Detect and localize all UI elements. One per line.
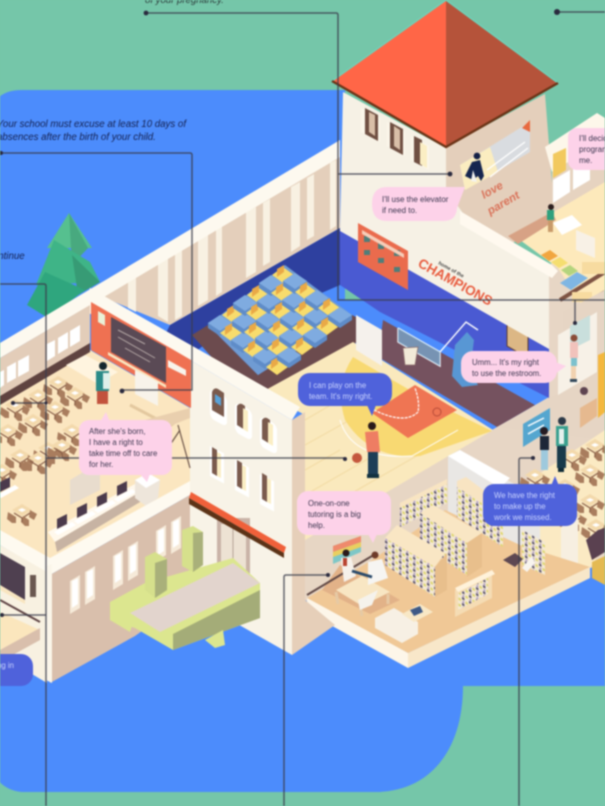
building: big beige right block bbox=[305, 232, 605, 653]
library: tables and sofa bbox=[336, 576, 433, 643]
library: floor platform bbox=[307, 510, 590, 668]
text: champions wall lettering: home of the bbox=[437, 261, 465, 280]
bubble: make up work: work we missed. bbox=[493, 513, 552, 522]
leader line dots bbox=[0, 9, 577, 617]
bubble: after she's born bbox=[79, 412, 172, 482]
bubble: play on the team: I can play on the bbox=[309, 381, 366, 390]
bubble: play on the team: team. It's my right. bbox=[309, 392, 372, 401]
bottom left classroom bbox=[0, 545, 52, 683]
text: love parent sign bbox=[480, 179, 523, 218]
left classroom: side table bbox=[130, 408, 190, 468]
bubble: make up work bbox=[483, 476, 577, 526]
text: absences note: Your school must excuse at least 10 days of bbox=[0, 119, 187, 130]
building: facade top rim bbox=[82, 288, 300, 420]
building: lower left wall bbox=[50, 495, 190, 683]
person: teacher bbox=[96, 362, 110, 404]
bubble: play on the team bbox=[298, 373, 392, 416]
text: absences note: absences after the birth of your child. bbox=[0, 132, 156, 143]
left classroom: teacher desk bbox=[66, 355, 118, 384]
library: back wall partition bbox=[307, 450, 540, 598]
building: floor rim below classroom bbox=[0, 481, 190, 575]
bubble: restroom bbox=[461, 351, 566, 383]
bubble: after she's born: for her. bbox=[89, 460, 113, 469]
left classroom: floor bbox=[0, 350, 190, 570]
text: love parent sign: parent bbox=[485, 189, 523, 218]
entrance: red awning bbox=[189, 492, 286, 558]
court: red key bbox=[340, 385, 458, 456]
icon: rainbow flag bbox=[333, 536, 361, 564]
bubble: elevator bbox=[372, 187, 465, 221]
gym floor bbox=[262, 342, 493, 540]
left classroom: student desks bbox=[0, 376, 90, 486]
left classroom: computer row bbox=[0, 462, 140, 552]
library: bookshelves bbox=[385, 477, 545, 617]
library: wall shadow beam bbox=[307, 553, 377, 595]
left classroom: printer bbox=[135, 473, 160, 506]
building: cream gym side wall bbox=[340, 92, 549, 349]
text: absences note bbox=[0, 119, 187, 143]
building: back rim along roofline bbox=[0, 140, 340, 358]
left classroom: whiteboard easel bbox=[130, 370, 188, 426]
text: champions wall lettering: CHAMPIONS bbox=[416, 256, 495, 309]
right lower room bbox=[515, 430, 605, 568]
entrance: door bbox=[217, 518, 250, 574]
bleachers bbox=[208, 265, 352, 375]
building: wall end face bbox=[549, 258, 563, 398]
bubble: bottom left partial bbox=[0, 654, 33, 686]
bubble: restroom: Umm... It's my right bbox=[472, 358, 540, 367]
building: main cream facade bbox=[190, 360, 292, 655]
text: love parent sign: love bbox=[480, 179, 506, 202]
bubble: make up work: to make up the bbox=[494, 502, 546, 511]
champions banner: red schedule board bbox=[358, 223, 408, 290]
bubble: elevator: if need to. bbox=[382, 206, 417, 215]
left classroom: red wall with blackboard bbox=[91, 302, 191, 408]
bubble: tutoring: help. bbox=[308, 521, 325, 530]
bubble: right top partial: me. bbox=[579, 156, 592, 165]
icon: low-poly tree bbox=[27, 213, 100, 318]
right middle room bbox=[497, 290, 605, 447]
building: right beige edge bbox=[292, 412, 335, 655]
person: far right at lower edge bbox=[586, 528, 605, 585]
person: two students bbox=[540, 417, 568, 472]
left classroom: back wall with windows bbox=[0, 305, 90, 405]
building: white wall rim bbox=[460, 211, 558, 278]
hoop: basketball hoop and pole bbox=[356, 315, 528, 387]
bubble: restroom: to use the restroom. bbox=[472, 369, 541, 378]
building: facade windows bbox=[210, 388, 277, 511]
bleacher base: brown stairs bbox=[192, 315, 368, 398]
tower: windows bbox=[361, 108, 429, 170]
roof bbox=[332, 0, 558, 147]
person: in upper room bbox=[547, 204, 554, 232]
tower: right face bbox=[446, 94, 552, 243]
entrance: lime steps and pillars bbox=[110, 526, 260, 650]
building: dark blue wall band bbox=[165, 228, 340, 352]
court: yellow zone bbox=[341, 357, 492, 456]
bubble: make up work: We have the right bbox=[494, 491, 556, 500]
person: gym player with ball bbox=[352, 422, 380, 478]
bubble: after she's born: take time off to care bbox=[89, 449, 157, 458]
gym stage: dark platform bbox=[378, 320, 535, 427]
building: gym back wall with pilasters bbox=[100, 155, 340, 325]
bubble: tutoring: One-on-one bbox=[308, 499, 350, 508]
bubble: tutoring: tutoring is a big bbox=[308, 510, 361, 519]
right upper room bbox=[508, 113, 605, 316]
bubble: after she's born: I have a right to bbox=[89, 438, 143, 447]
bubble: tutoring bbox=[297, 491, 391, 543]
building: lower left windows bbox=[70, 516, 181, 614]
person: tutoring students bbox=[341, 550, 388, 610]
person: girl at window bbox=[570, 334, 578, 382]
bubble: after she's born: After she's born, bbox=[89, 427, 146, 436]
tower: stair window bbox=[460, 120, 530, 190]
person: on tower stairs bbox=[465, 153, 484, 182]
bubble: right top partial bbox=[568, 128, 605, 170]
building: gym blue wall bbox=[340, 228, 549, 398]
bubble: elevator: I'll use the elevator bbox=[382, 195, 449, 204]
